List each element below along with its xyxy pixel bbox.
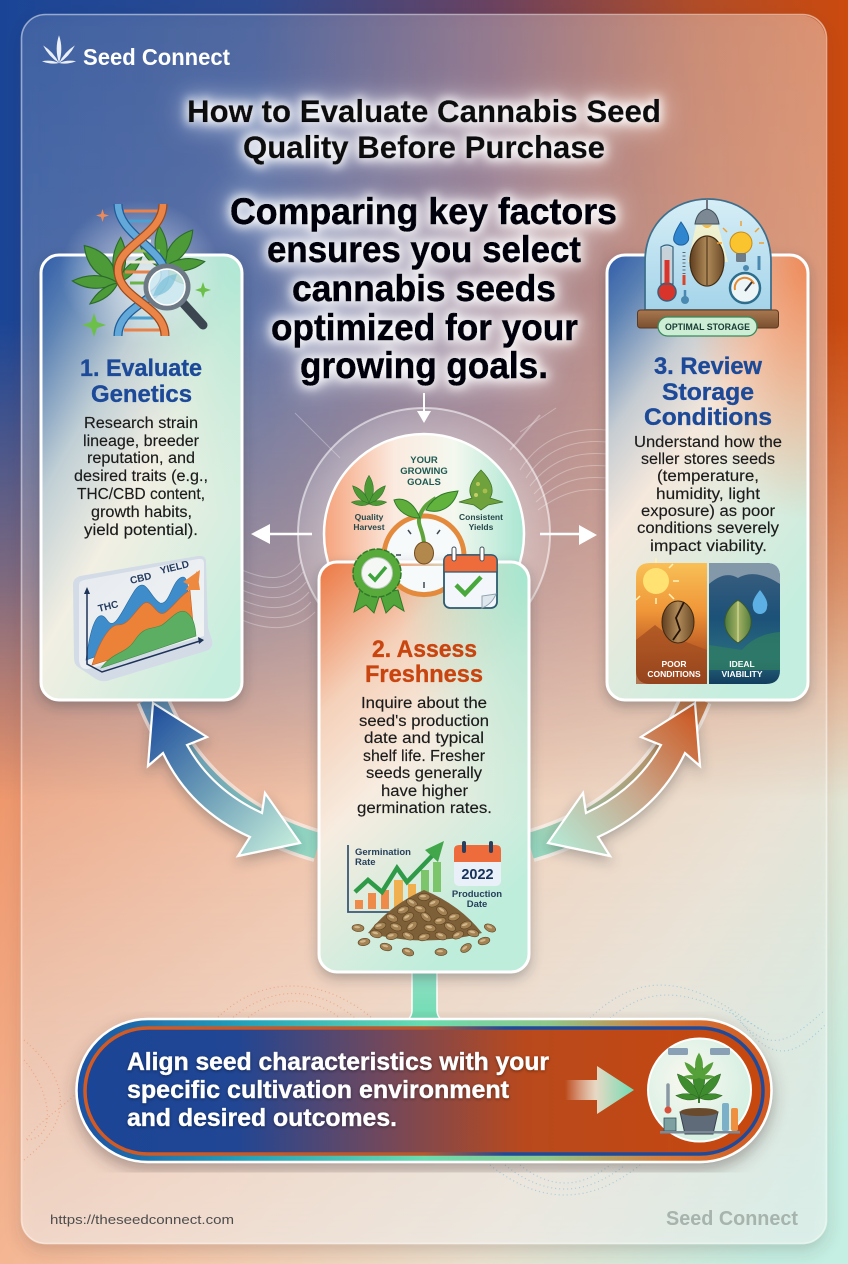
callout text: and desired outcomes. — [127, 1104, 397, 1132]
outer glass ring — [298, 408, 550, 660]
title: How to Evaluate Cannabis Seed — [187, 93, 661, 129]
panel: 1 evaluate genetics — [41, 200, 242, 700]
heading: 3. Review — [654, 353, 762, 380]
label: consistent yields: Yields — [469, 522, 494, 532]
label: production date: Production — [452, 889, 502, 900]
icon: clock lower part — [386, 566, 462, 596]
heading: Conditions — [644, 404, 772, 431]
chart: germination rate: Rate — [355, 857, 376, 868]
image: poor conditions vs ideal viability — [636, 558, 780, 684]
arrow: left — [251, 524, 312, 544]
connector to pill — [400, 970, 449, 1024]
body text: germination rates. — [357, 800, 492, 817]
arrow band: back curve left — [152, 698, 318, 846]
arrow: top — [417, 393, 431, 423]
subtitle: Comparing key factors — [230, 190, 617, 232]
subtitle: growing goals. — [300, 344, 548, 386]
card background — [607, 255, 808, 700]
callout text: specific cultivation environment — [127, 1076, 510, 1104]
arrow band fill right — [530, 698, 696, 846]
body text: impact viability. — [650, 538, 767, 555]
body text: (temperature, — [657, 468, 759, 485]
heading: 2. Assess — [372, 636, 477, 663]
subtitle: ensures you select — [267, 228, 581, 270]
body text: desired traits (e.g., — [74, 468, 208, 485]
icon: sprout with seed — [394, 491, 458, 564]
double arrow: left — [148, 703, 300, 856]
arrow: right — [540, 525, 597, 545]
chart: thc cbd yield: YIELD — [159, 559, 190, 577]
label: production date — [452, 889, 502, 910]
heading — [365, 636, 483, 688]
arrow — [565, 1066, 634, 1114]
icon: quality badge — [353, 549, 404, 613]
body text: have higher — [381, 783, 468, 800]
subtitle — [230, 190, 617, 386]
poor conditions side: CONDITIONS — [647, 669, 701, 679]
subtitle: cannabis seeds — [292, 267, 556, 309]
chart: germination rate: Germination — [355, 847, 411, 858]
chart: thc cbd yield: CBD — [129, 571, 153, 587]
callout text — [127, 1048, 549, 1132]
body text: Inquire about the — [361, 695, 487, 712]
callout pill: align seed characteristics — [76, 1019, 772, 1162]
chart: thc cbd yield — [73, 556, 212, 681]
footer url: https://theseedconnect.com — [50, 1212, 234, 1227]
goals label: GROWING — [400, 466, 448, 477]
heading — [80, 355, 202, 408]
poor conditions side — [636, 558, 707, 684]
body text: humidity, light — [656, 486, 761, 503]
card background — [41, 255, 242, 700]
subtitle: optimized for your — [271, 306, 578, 348]
pill inner — [85, 1028, 763, 1154]
body text — [357, 695, 492, 817]
label: consistent yields: Consistent — [459, 512, 503, 522]
ideal viability side: VIABILITY — [721, 669, 763, 679]
body text: exposure) as poor — [641, 503, 775, 520]
footer brand: Seed Connect — [666, 1208, 798, 1230]
panel: 3 review storage conditions — [607, 199, 808, 700]
icon: storage dome — [638, 199, 778, 328]
ideal viability side: IDEAL — [729, 659, 755, 669]
goals label: GOALS — [407, 477, 441, 488]
body text: date and typical — [364, 730, 484, 747]
icon: production calendar — [454, 841, 501, 886]
body text: Research strain — [84, 415, 198, 432]
clock behind panel 2 icons — [384, 516, 464, 596]
circle icon: plant in pot — [648, 1038, 751, 1142]
brand name: Seed Connect — [83, 44, 230, 70]
icon: production calendar: 2022 — [461, 867, 494, 883]
icon glow — [60, 200, 220, 344]
panel: 2 assess freshness — [319, 491, 529, 972]
label: optimal storage: OPTIMAL STORAGE — [665, 322, 750, 332]
body text: shelf life. Fresher — [363, 748, 485, 765]
body text: reputation, and — [87, 450, 195, 467]
heading: Storage — [662, 379, 754, 406]
body text: growth habits, — [91, 504, 192, 521]
arrow band: back curve right — [530, 698, 696, 846]
heading: Freshness — [365, 661, 483, 688]
icon: dna with leaves and magnifier — [56, 204, 219, 337]
title: Quality Before Purchase — [243, 129, 605, 165]
body text: seller stores seeds — [641, 451, 775, 468]
label: production date: Date — [467, 899, 487, 910]
pill outer band — [76, 1019, 772, 1162]
chart: thc cbd yield: THC — [97, 599, 120, 615]
goals label: YOUR — [410, 455, 438, 466]
poor conditions side: POOR — [661, 659, 687, 669]
decorative wave arcs — [242, 408, 607, 628]
heading — [644, 353, 772, 431]
label: optimal storage — [658, 317, 757, 336]
dotted wave decoration — [24, 985, 825, 1195]
card background — [319, 562, 529, 972]
icon: seed pile — [352, 890, 497, 957]
double arrow: right — [548, 703, 700, 856]
body text: seed's production — [359, 713, 489, 730]
body text: THC/CBD content, — [77, 486, 205, 503]
label: quality harvest: Quality — [355, 512, 384, 522]
icon: bud — [459, 470, 503, 510]
logo — [42, 35, 230, 70]
panel right-side lightening — [299, 16, 826, 664]
icon: leaf — [42, 35, 76, 64]
heading: Genetics — [91, 381, 192, 408]
icon: calendar with check — [444, 547, 497, 608]
label: quality harvest — [353, 512, 385, 532]
body text: seeds generally — [366, 765, 482, 782]
body text: lineage, breeder — [83, 433, 199, 450]
arrow band fill left — [152, 698, 318, 846]
body text: Understand how the — [634, 434, 782, 451]
body text — [74, 415, 208, 539]
chart: germination rate — [348, 841, 444, 912]
inner circle — [324, 434, 524, 634]
heading: 1. Evaluate — [80, 355, 202, 382]
central circle: your growing goals — [298, 408, 550, 660]
label: consistent yields — [459, 512, 503, 532]
body text: conditions severely — [637, 520, 779, 537]
body text: yield potential). — [84, 522, 198, 539]
ideal viability side — [709, 563, 780, 684]
callout text: Align seed characteristics with your — [127, 1048, 549, 1076]
body text — [634, 434, 782, 555]
goals label — [400, 455, 448, 488]
icon: quality leaf — [350, 475, 388, 506]
title — [187, 93, 661, 165]
label: quality harvest: Harvest — [353, 522, 385, 532]
